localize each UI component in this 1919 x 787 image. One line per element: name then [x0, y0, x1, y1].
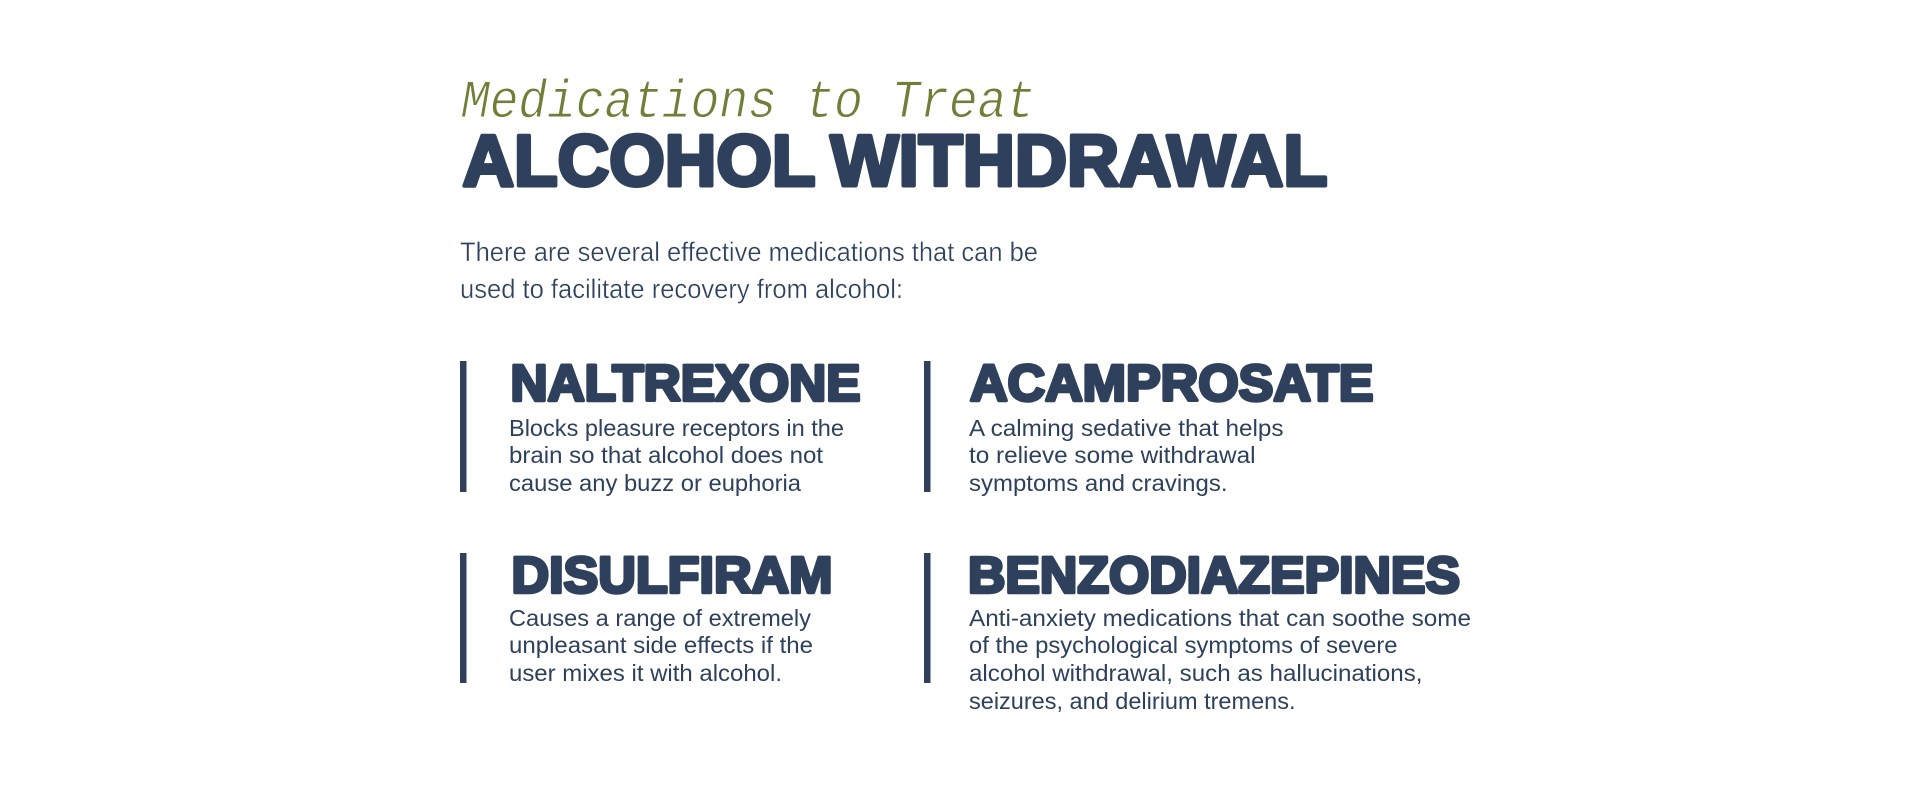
bar	[924, 361, 930, 492]
heading: DISULFIRAM	[512, 546, 832, 604]
intro text	[460, 237, 1038, 304]
description	[509, 605, 813, 686]
intro text: used to facilitate recovery from alcohol:	[460, 274, 903, 304]
description: unpleasant side effects if the	[509, 632, 813, 658]
panel: benzodiazepines	[924, 546, 1471, 714]
title: ALCOHOL	[462, 122, 816, 202]
description: Anti-anxiety medications that can soothe some	[969, 605, 1471, 631]
bar	[460, 361, 466, 492]
description	[969, 605, 1471, 714]
description: A calming sedative that helps	[969, 415, 1284, 441]
panel: naltrexone	[460, 354, 860, 496]
description: seizures, and delirium tremens.	[969, 688, 1296, 714]
bar	[460, 553, 466, 683]
description	[509, 415, 844, 496]
subtitle: Medications to Treat	[461, 73, 1035, 134]
description: of the psychological symptoms of severe	[969, 632, 1398, 658]
description: Blocks pleasure receptors in the	[509, 415, 844, 441]
description: brain so that alcohol does not	[509, 442, 823, 468]
heading: NALTREXONE	[510, 354, 860, 412]
panel: acamprosate	[924, 354, 1374, 496]
description: to relieve some withdrawal	[969, 442, 1256, 468]
heading: BENZODIAZEPINES	[968, 546, 1460, 604]
bar	[924, 553, 930, 683]
panel: disulfiram	[460, 546, 832, 686]
title	[462, 122, 1328, 202]
description: cause any buzz or euphoria	[509, 470, 802, 496]
description: Causes a range of extremely	[509, 605, 811, 631]
intro text: There are several effective medications that can be	[460, 237, 1038, 267]
heading: ACAMPROSATE	[970, 354, 1374, 412]
description: alcohol withdrawal, such as hallucinations,	[969, 660, 1422, 686]
description	[969, 415, 1284, 496]
title: WITHDRAWAL	[830, 122, 1328, 202]
description: user mixes it with alcohol.	[509, 660, 782, 686]
description: symptoms and cravings.	[969, 470, 1228, 496]
